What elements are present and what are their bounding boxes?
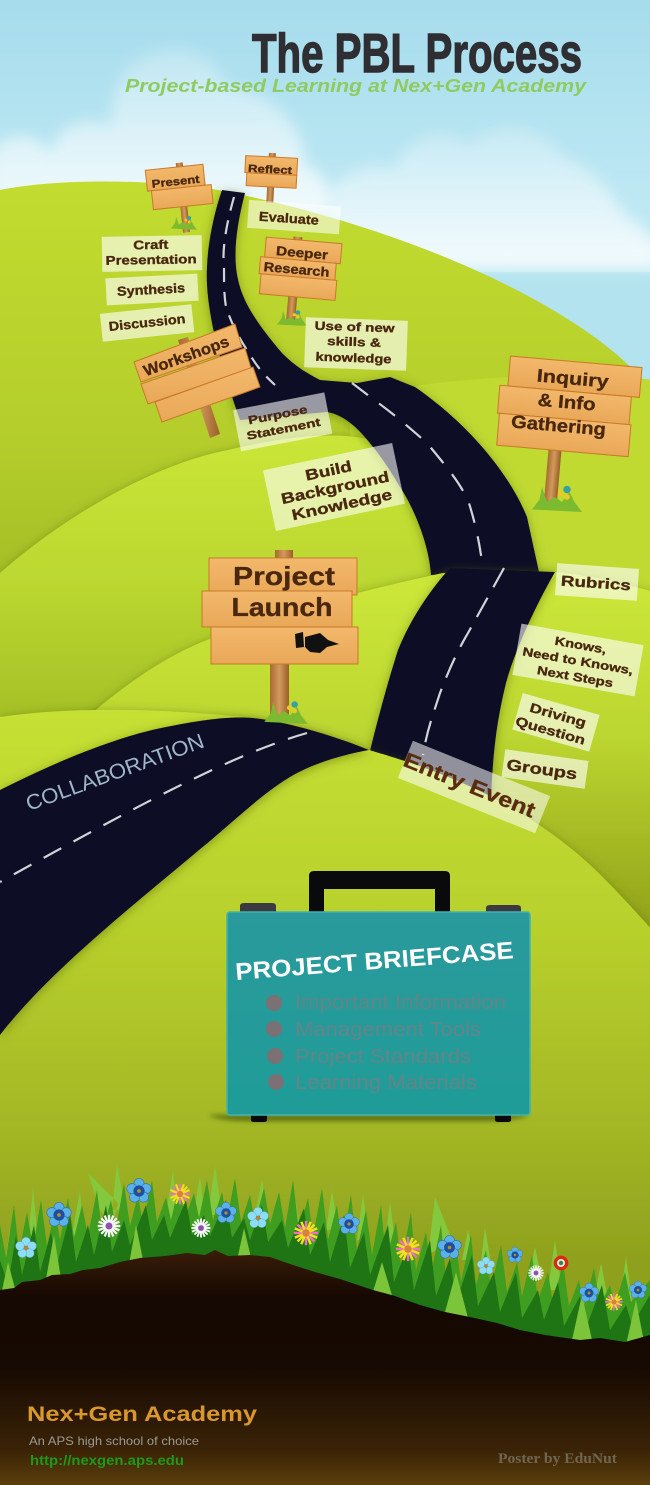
hill: top hill (0, 182, 650, 760)
soil mound (0, 1250, 650, 1485)
sign: Inquiry and Info Gathering: Inquiry (536, 365, 610, 392)
tag: Craft Presentation: Craft (133, 238, 169, 252)
tag: Groups (501, 749, 589, 789)
icon: Project Launch grass (264, 701, 308, 724)
sign: Reflect (243, 152, 298, 204)
tag: Synthesis: Synthesis (117, 280, 185, 299)
latches (240, 903, 521, 912)
tag: Use of new skills and knowledge: skills & (327, 334, 382, 350)
sign: Present: Present (151, 174, 201, 191)
icon: pointing hand (295, 632, 339, 653)
sign: Inquiry and Info Gathering: Gathering (510, 411, 607, 440)
road: collaboration road: COLLABORATION (23, 730, 207, 816)
briefcase list (266, 991, 506, 1094)
shadow (208, 1115, 530, 1121)
flowers (16, 1178, 647, 1311)
hill: right hill behind sign (350, 376, 650, 760)
tag: Evaluate: Evaluate (258, 209, 319, 228)
tag: Evaluate (247, 200, 341, 234)
tag: Craft Presentation (102, 235, 202, 272)
tag: Use of new skills and knowledge (304, 317, 408, 371)
grass (0, 1163, 650, 1360)
tag: Driving Question: Driving (528, 700, 588, 730)
road: middle straight road (369, 568, 555, 800)
tag: Rubrics: Rubrics (560, 574, 631, 594)
tag: Build Background Knowledge: Background (280, 469, 391, 508)
tag: Build Background Knowledge: Knowledge (290, 486, 394, 524)
icon: Present grass (171, 216, 197, 230)
tag: Synthesis (105, 274, 199, 305)
road: upper winding road (207, 190, 539, 575)
briefcase list: Important Information (295, 991, 506, 1014)
sign: Project Launch: Project (233, 561, 335, 591)
icon: Inquiry grass (532, 486, 582, 512)
footer: poster credit: Poster by EduNut (498, 1451, 617, 1467)
tag: Groups: Groups (505, 757, 578, 783)
briefcase heading: PROJECT BRIEFCASE (234, 937, 515, 986)
tag: Craft Presentation: Presentation (105, 252, 197, 268)
sign: Deeper Research: Deeper (276, 243, 329, 263)
tag: Use of new skills and knowledge: knowledge (315, 350, 392, 366)
briefcase list: Management Tools (295, 1018, 481, 1041)
tag: Knows, Need to Knows, Next Steps: Need to Knows, (521, 644, 634, 678)
tag: Knows, Need to Knows, Next Steps: Next Steps (536, 663, 615, 690)
briefcase list: Learning Materials (295, 1071, 477, 1094)
case body (227, 912, 530, 1115)
hill: launch hill (0, 572, 650, 960)
sign: Deeper Research: Research (263, 259, 330, 280)
sign: Inquiry and Info Gathering: & Info (537, 390, 596, 415)
sign: Deeper Research (255, 234, 342, 328)
tag: Purpose Statement (233, 392, 332, 451)
tag: Use of new skills and knowledge: Use of new (314, 319, 396, 335)
tag: Purpose Statement: Statement (246, 417, 322, 443)
tag: Knows, Need to Knows, Next Steps (512, 624, 644, 696)
tag: Driving Question: Question (514, 713, 587, 748)
tag: Rubrics (555, 563, 639, 601)
hill: foreground hill (0, 710, 650, 1485)
tag: Entry Event (397, 740, 550, 833)
tag: Discussion (100, 304, 194, 342)
tag: Entry Event: Entry Event (400, 749, 538, 822)
tag: Driving Question (512, 693, 600, 752)
handle (309, 871, 450, 912)
briefcase list: Project Standards (295, 1045, 471, 1068)
sky background (0, 0, 650, 402)
sign: Workshops: Workshops (141, 333, 232, 380)
tag: Knows, Need to Knows, Next Steps: Knows, (554, 634, 607, 657)
tag: Build Background Knowledge (263, 443, 405, 531)
footer: academy name: Nex+Gen Academy (27, 1403, 257, 1426)
feet (251, 1115, 511, 1122)
hill: middle left hill (0, 435, 442, 800)
tag: Build Background Knowledge: Build (304, 458, 353, 484)
tag: Discussion: Discussion (108, 311, 186, 334)
sign: Present (145, 160, 216, 236)
sign: Workshops (134, 324, 260, 438)
briefcase (208, 871, 530, 1122)
subtitle: Project-based Learning at Nex+Gen Academy (125, 75, 588, 96)
tag: Purpose Statement: Purpose (247, 404, 309, 427)
footer: tagline: An APS high school of choice (29, 1434, 199, 1448)
road: collaboration road (0, 717, 369, 1035)
sign: Reflect: Reflect (248, 163, 293, 177)
clouds (0, 49, 650, 268)
sign: Inquiry and Info Gathering (490, 355, 642, 510)
sign: Project Launch: Launch (232, 592, 332, 622)
sign: Project Launch (202, 550, 358, 720)
icon: Deeper Research grass (277, 310, 307, 326)
footer: url: http://nexgen.aps.edu (30, 1452, 184, 1468)
